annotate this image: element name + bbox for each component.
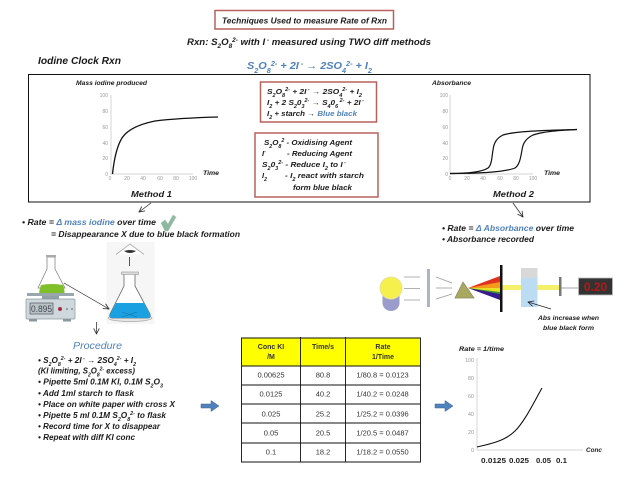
illustration: balance with green flask: 0.895 [31, 304, 52, 314]
chart: rate vs concentration: 80 [468, 376, 474, 382]
chart: mass iodine produced: 80 [173, 176, 179, 182]
table: results: 1/18.2 = 0.0550 [356, 448, 409, 456]
chart: absorbance: 0 [449, 176, 452, 182]
chart: rate vs concentration: 20 [468, 430, 474, 436]
chart: mass iodine produced: 80 [102, 109, 108, 115]
chart: rate vs concentration: 0.0125 [481, 456, 506, 465]
text: method 1 rate [22, 218, 240, 239]
callout: abs increase: blue black form [543, 325, 594, 332]
chart: absorbance: 20 [464, 176, 470, 182]
table: results: Rate [375, 344, 391, 351]
panel: methods frame [28, 74, 590, 202]
chart: absorbance: 100 [440, 93, 448, 99]
table: results: Conc KI [258, 344, 284, 351]
box: agents: S2032- - Reduce I 2 to I - [262, 160, 346, 172]
table: results: 40.2 [316, 390, 330, 398]
chart: absorbance: 80 [513, 176, 519, 182]
table: results: 1/20.5 = 0.0487 [356, 428, 409, 438]
arrow: method 2 to rate [513, 203, 523, 217]
table: results: 1/Time [372, 354, 394, 361]
arrow: table to graph [435, 400, 453, 412]
table: results: 18.2 [316, 448, 330, 456]
box: agents: I2 [262, 171, 267, 183]
chart: absorbance: 100 [529, 176, 537, 182]
icon: check mark [161, 215, 176, 231]
chart: rate vs concentration: 40 [468, 412, 474, 418]
box: agents: form blue black [293, 183, 353, 192]
chart: rate vs concentration: 0.025 [509, 456, 529, 465]
box: agents: - Reducing Agent [287, 149, 353, 158]
chart: mass iodine produced: 20 [124, 176, 130, 182]
chart: absorbance: 40 [480, 176, 486, 182]
chart: mass iodine produced: 20 [102, 156, 108, 162]
chart: absorbance [431, 80, 577, 182]
box: reaction equations: I2 + 2 S 2032- → S 406 2- + 2I - [267, 98, 364, 110]
box: agents: I- [262, 149, 266, 158]
text: procedure steps: • Add 1ml starch to flask [38, 389, 135, 398]
chart: mass iodine produced: 40 [140, 176, 146, 182]
text: method 2 rate: • Rate = Δ Absorbance over time [442, 224, 575, 233]
callout: abs increase: Abs increase when [537, 315, 599, 322]
main equation: S2O82- + 2I - → 2SO42- + I2 [247, 60, 372, 74]
chart: rate vs concentration: 0.05 [536, 456, 551, 465]
chart: mass iodine produced: Mass iodine produced [76, 80, 148, 87]
table: results: 20.5 [316, 428, 330, 438]
table: results: 0.1 [266, 448, 276, 456]
chart: absorbance: 60 [497, 176, 503, 182]
table: results: 1/80.8 = 0.0123 [356, 370, 409, 380]
arrow: to procedure [96, 322, 98, 334]
title box [215, 10, 394, 29]
arrow: method 1 to rate [139, 203, 151, 212]
label: method 2: Method 2 [493, 189, 534, 199]
chart: rate vs concentration [459, 346, 602, 465]
chart: absorbance: Absorbance [431, 80, 471, 87]
title box: Techniques Used to measure Rate of Rxn [222, 16, 387, 26]
text: procedure steps: • Record time for X to disappear [38, 422, 161, 431]
label: method 1: Method 1 [131, 189, 172, 199]
box: reaction equations: S2O82- + 2I - → 2SO 42- + I2 [267, 87, 362, 99]
chart: rate vs concentration: Conc [586, 447, 602, 454]
table: results [242, 337, 420, 462]
chart: mass iodine produced: 0 [105, 172, 108, 178]
table: results: 0.05 [264, 428, 278, 438]
text: method 1 rate: = Disappearance X due to blue black formation [51, 230, 240, 239]
chart: mass iodine produced: 60 [102, 125, 108, 131]
text: procedure steps: • S2O82- + 2I - → 2SO 42- + I2 [38, 356, 136, 368]
text: procedure steps: • Repeat with diff KI conc [38, 433, 136, 442]
text: method 1 rate: • Rate = Δ mass iodine over time [22, 218, 157, 227]
chart: mass iodine produced: 40 [102, 141, 108, 147]
text: procedure steps: • Pipette 5 ml 0.1M S 2O82- to flask [38, 411, 167, 423]
chart: mass iodine produced: 60 [157, 176, 163, 182]
illustration: eye above blue flask [106, 242, 154, 324]
arrow: absorbance cell callout [528, 302, 551, 309]
chart: rate vs concentration: 60 [468, 394, 474, 400]
chart: absorbance: 20 [442, 156, 448, 162]
text: method 2 rate [442, 224, 575, 244]
table: results: /M [267, 354, 275, 361]
text: procedure steps: (KI limiting, S2O82- excess) [38, 366, 135, 378]
table: results: 0.0125 [260, 390, 282, 398]
chart: absorbance: 0 [445, 172, 448, 178]
box: agents: S2O82 - Oxidising Agent [264, 138, 353, 150]
chart: mass iodine produced: 0 [109, 176, 112, 182]
chart: absorbance: 40 [442, 141, 448, 147]
chart: absorbance: 60 [442, 125, 448, 131]
chart: rate vs concentration: 0 [471, 448, 474, 454]
box: reaction equations: I2 + starch → Blue black [267, 109, 358, 121]
callout: abs increase [537, 315, 599, 332]
text: procedure steps: • Pipette 5ml 0.1M KI, 0.1M S 2O3 [38, 378, 163, 390]
text: procedure steps: • Place on white paper with cross X [38, 400, 176, 409]
table: results: 0.025 [262, 410, 280, 418]
chart: mass iodine produced: Time [203, 170, 219, 177]
chart: rate vs concentration: Rate = 1/time [459, 346, 504, 353]
chart: mass iodine produced [76, 80, 219, 182]
text: procedure steps [38, 356, 176, 442]
box: reaction equations [260, 82, 376, 122]
table: results: 1/40.2 = 0.0248 [356, 390, 409, 398]
arrow: balance to flask [64, 283, 109, 309]
box: agents: - I2 react with starch [285, 171, 364, 183]
table: results: 1/25.2 = 0.0396 [356, 410, 409, 418]
heading: iodine clock: Iodine Clock Rxn [38, 56, 121, 67]
illustration: balance with green flask [26, 256, 75, 322]
chart: mass iodine produced: 100 [100, 93, 108, 99]
chart: mass iodine produced: 100 [189, 176, 197, 182]
chart: rate vs concentration: 0.1 [556, 456, 567, 465]
chart: rate vs concentration: 100 [465, 358, 474, 364]
table: results: 25.2 [316, 410, 330, 418]
arrow: procedure to table [201, 400, 219, 412]
box: agents [255, 133, 378, 197]
illustration: spectrophotometer: 0.20 [584, 280, 608, 294]
table: results: 80.8 [316, 370, 330, 380]
subtitle: Rxn: S 2O82- with I - measured using TWO diff methods [187, 37, 431, 50]
text: method 2 rate: • Absorbance recorded [442, 235, 535, 244]
table: results: Time/s [312, 344, 334, 351]
table: results: 0.00625 [257, 370, 285, 380]
chart: absorbance: 80 [442, 109, 448, 115]
chart: absorbance: Time [544, 170, 560, 177]
illustration: spectrophotometer [380, 265, 612, 312]
heading: procedure: Procedure [73, 341, 122, 352]
